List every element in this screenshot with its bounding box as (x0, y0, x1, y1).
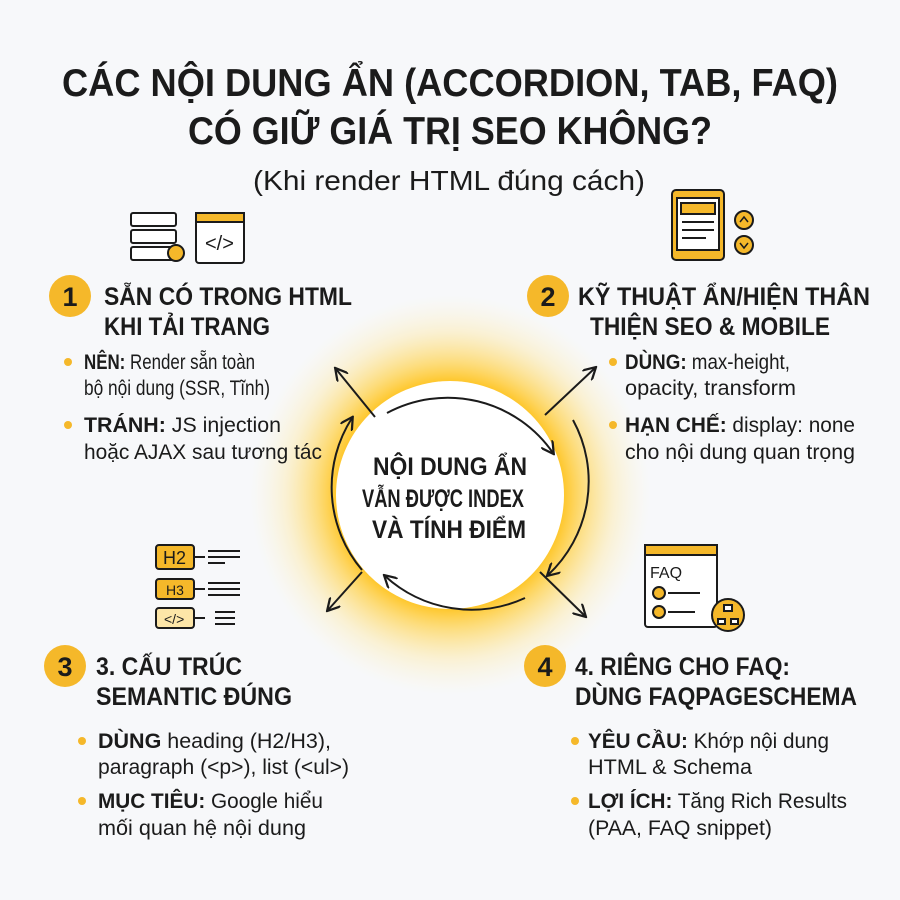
heading 2: KỸ THUẬT ẨN/HIỆN THÂN (578, 281, 870, 311)
badge 3 (44, 645, 86, 687)
arrows: outward (328, 368, 595, 616)
panel 4 (524, 645, 857, 840)
bullets 2: DÙNG: max-height, (625, 350, 790, 374)
bullets 2: opacity, transform (625, 377, 796, 400)
badge 2 (527, 275, 569, 317)
panel 1 (49, 275, 352, 464)
center text: VÀ TÍNH ĐIỂM (372, 515, 526, 544)
bullets 1: TRÁNH: JS injection (84, 414, 281, 437)
center text: VẪN ĐƯỢC INDEX (362, 483, 524, 513)
bullets 4 (571, 729, 847, 840)
bullets 3: DÙNG heading (H2/H3), (98, 729, 331, 753)
bullets 4: (PAA, FAQ snippet) (588, 817, 772, 840)
arrows: cycle (332, 398, 589, 610)
heading 1 (104, 281, 352, 341)
bullets 2: HẠN CHẾ: display: none (625, 414, 855, 437)
bullets 2: cho nội dung quan trọng (625, 441, 855, 464)
panel 2 (527, 275, 870, 464)
icon: heading structure: H2 (163, 548, 186, 568)
icon: heading structure: </> (164, 611, 184, 627)
heading 3: SEMANTIC ĐÚNG (96, 681, 292, 711)
bullets 2 (609, 350, 855, 464)
bullets 1: hoặc AJAX sau tương tác (84, 441, 322, 464)
badge 1 (49, 275, 91, 317)
panel 3 (44, 645, 349, 840)
title: CÓ GIỮ GIÁ TRỊ SEO KHÔNG? (188, 108, 712, 153)
center text: NỘI DUNG ẨN (373, 451, 527, 481)
badge 4 (524, 645, 566, 687)
badge 1: 1 (62, 282, 78, 312)
heading 4 (575, 651, 857, 711)
badge 2: 2 (540, 282, 556, 312)
heading 4: DÙNG FAQPAGESCHEMA (575, 681, 857, 711)
heading 2 (578, 281, 870, 341)
title: CÁC NỘI DUNG ẨN (ACCORDION, TAB, FAQ) (62, 60, 838, 105)
heading 2: THIỆN SEO & MOBILE (590, 311, 830, 341)
center text (362, 451, 527, 544)
bullets 3: MỤC TIÊU: Google hiểu (98, 789, 323, 813)
center glow circle (250, 295, 650, 695)
bullets 1 (64, 350, 322, 464)
bullets 4: LỢI ÍCH: Tăng Rich Results (588, 790, 847, 813)
bullets 3: mối quan hệ nội dung (98, 817, 306, 840)
bullets 1: NÊN: Render sẵn toàn (84, 350, 255, 374)
bullets 3: paragraph (<p>), list (<ul>) (98, 756, 349, 779)
subtitle: (Khi render HTML đúng cách) (253, 165, 645, 196)
heading 1: KHI TẢI TRANG (104, 311, 270, 341)
icon: heading structure: H3 (166, 582, 184, 598)
badge 3: 3 (57, 652, 73, 682)
bullets 4: YÊU CẦU: Khớp nội dung (588, 729, 829, 753)
icon: server and code: </> (205, 233, 234, 255)
bullets 1: bộ nội dung (SSR, Tĩnh) (84, 377, 270, 400)
icon: heading structure (156, 545, 240, 628)
bullets 4: HTML & Schema (588, 756, 752, 779)
icon: server and code (131, 213, 244, 263)
title (62, 60, 838, 153)
heading 4: 4. RIÊNG CHO FAQ: (575, 651, 790, 681)
badge 4: 4 (537, 652, 553, 682)
icon: FAQ window (645, 545, 744, 631)
heading 3: 3. CẤU TRÚC (96, 651, 242, 681)
heading 3 (96, 651, 292, 711)
bullets 3 (78, 729, 349, 840)
icon: mobile with chevrons (672, 190, 753, 260)
heading 1: SẴN CÓ TRONG HTML (104, 281, 352, 311)
icon: FAQ window: FAQ (650, 565, 682, 582)
